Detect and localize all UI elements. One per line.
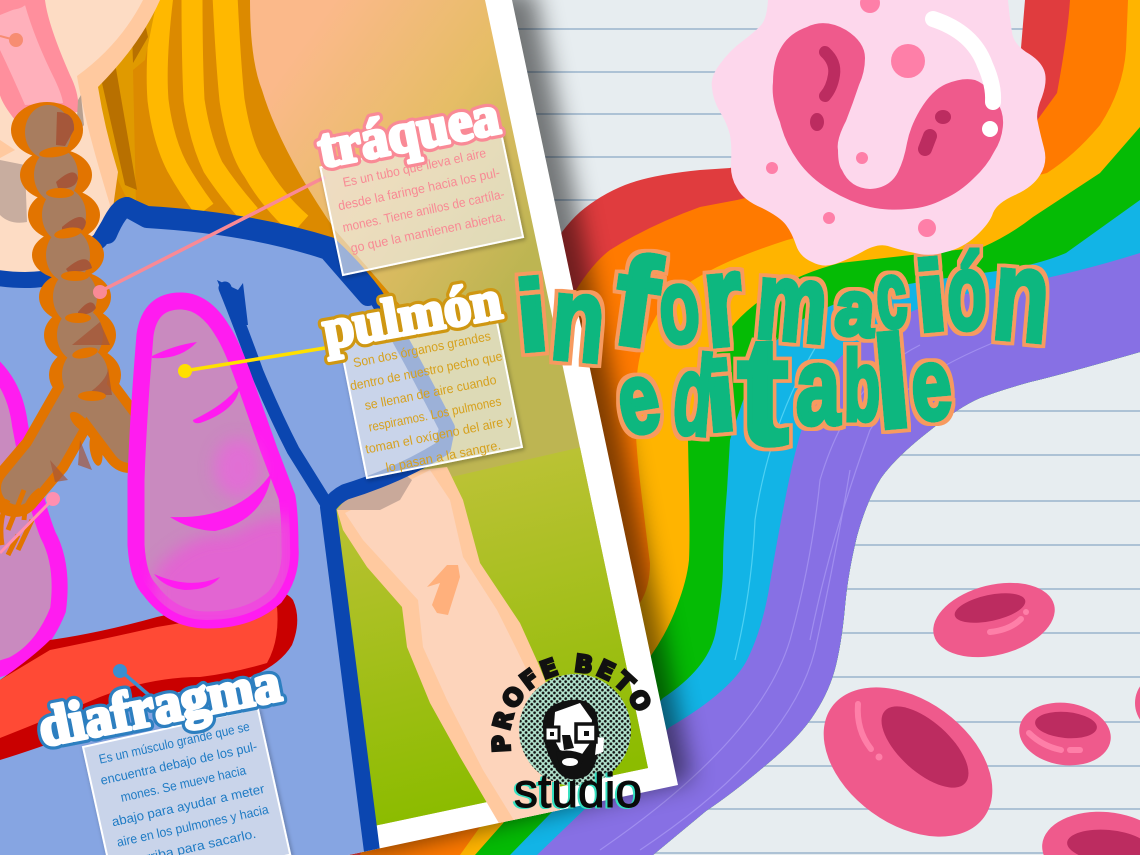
text card: pulmón: lo pasan a la sangre. [384,437,502,475]
shirt [0,205,447,855]
title line 2: i [701,342,740,452]
title line 1: r [697,224,749,375]
cell body [712,0,1046,266]
title line 1: o [654,246,704,366]
text card: diafragma: Es un músculo grande que se [97,719,251,767]
heading: pulmón: pulmón [318,269,506,361]
title line 2: b [844,331,880,442]
logo: Profe Beto studio: PROFE BETO [490,652,651,752]
red blood cell: large [796,657,1020,855]
text card: tráquea: Es un tubo que lleva el aire [341,145,487,190]
text card: pulmón: respiramos. Los pulmones [367,393,503,435]
text card: diafragma: aire en los pulmones y hacia [115,801,271,850]
red blood cell: small [1015,697,1115,771]
title line 1: i [911,241,951,353]
poster background [0,0,660,855]
title line 2: a [796,325,841,448]
title line 1: n [546,250,611,389]
heading: tráquea: tráquea [313,84,504,180]
cell granules [766,0,936,237]
heading: diafragma: diafragma [33,652,286,759]
right lung [136,301,295,630]
heading: pulmón: pulmón [318,269,506,361]
title line 2: t [737,305,789,477]
heading: tráquea: tráquea [313,84,504,180]
red blood cell: bottom right [1039,807,1140,855]
title line 2: l [868,308,916,456]
text card: diafragma: abajo para ayudar a meter [110,781,267,829]
title line 2: d [669,331,718,460]
logo halftone badge [519,674,631,786]
cell nucleus [773,23,1003,210]
text card: pulmón: dentro de nuestro pecho que [349,348,504,393]
red blood cell: right edge [1135,673,1140,733]
logo wordmark: studio [512,766,640,819]
title line 2: e [609,340,668,457]
text card: tráquea [320,129,523,275]
arm [337,467,560,825]
connector: tráquea [93,177,325,299]
title line 1: i [512,260,552,373]
title line 2: e [906,325,956,443]
white blood cell [712,0,1046,266]
title line 1: ó [947,231,987,352]
logo wordmark: studio [514,765,642,818]
connector: lower pink [0,492,60,553]
title: información editable [512,220,1056,477]
cell highlight [933,19,998,137]
text card: pulmón: toman el oxígeno del aire y [364,412,514,457]
text card: pulmón: se llenan de aire cuando [363,372,498,413]
connector: diafragma [113,664,157,702]
text card: pulmón: Son dos órganos grandes [352,328,492,370]
rainbow brush strokes [300,0,1140,855]
title line 1: a [832,263,879,354]
throat [0,0,84,135]
logo portrait [543,700,604,779]
heading: diafragma: diafragma [33,652,286,759]
red blood cell: top [925,571,1063,669]
text card: diafragma: encuentra debajo de los pul- [99,739,258,788]
shadow of the poster [20,0,692,855]
text card: diafragma [83,708,290,855]
poster white frame [0,0,678,855]
title line 2 [609,305,956,477]
title line 1: c [872,242,911,349]
text card: diafragma: mones. Se mueve hacia [119,762,248,805]
text card: tráquea: go que la mantienen abierta. [349,208,507,256]
text card: pulmón [341,315,522,479]
logo arc text [510,672,642,752]
logo: Profe Beto studio [490,652,651,819]
title line 1: f [605,228,668,375]
cell dark spots [810,52,951,149]
text card: tráquea: mones. Tiene anillos de cartíla- [341,186,506,235]
text card: tráquea: desde la faringe hacia los pul- [337,165,501,213]
title line 1 [512,220,1056,389]
trachea and bronchi [1,102,130,555]
left lung [0,363,60,672]
hair [96,0,400,305]
neck and face skin [0,0,160,300]
poster illustration [0,0,660,855]
title line 1: m [752,239,833,367]
diaphragm [0,592,297,760]
title line 1: n [988,220,1056,370]
connector: pulmón [178,348,325,378]
